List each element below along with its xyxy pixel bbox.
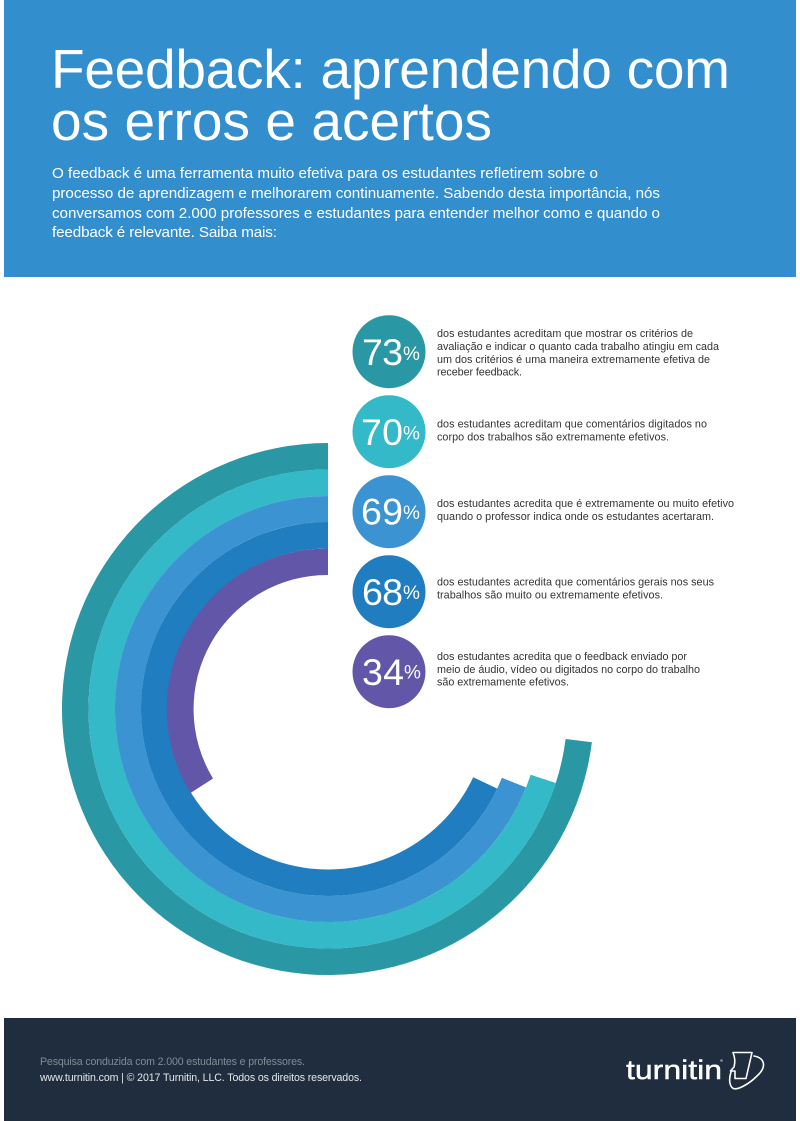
intro text: O feedback é uma ferramenta muito efetiva para os estudantes refletirem sobre o bbox=[52, 165, 598, 182]
stat text: 70% bbox=[437, 418, 707, 443]
stat text: 69% bbox=[437, 498, 734, 523]
stat text: 34%: são extremamente efetivos. bbox=[437, 676, 569, 688]
stat text: 34%: meio de áudio, vídeo ou digitados no corpo do trabalho bbox=[437, 664, 700, 676]
circle badge: 69%: % bbox=[403, 503, 420, 524]
stat text: 70%: corpo dos trabalhos são extremamente efetivos. bbox=[437, 431, 669, 443]
stat text: 34%: dos estudantes acredita que o feedback enviado por bbox=[437, 651, 687, 663]
title bbox=[51, 38, 730, 152]
stat text: 69%: quando o professor indica onde os estudantes acertaram. bbox=[437, 511, 714, 523]
intro text bbox=[52, 165, 660, 241]
footer panel bbox=[4, 1018, 796, 1121]
circle badge: 70% bbox=[352, 395, 426, 468]
stat: 69% bbox=[352, 475, 734, 548]
logo: turnitin: turnitin bbox=[626, 1055, 722, 1085]
intro text: processo de aprendizagem e melhorarem continuamente. Sabendo desta importância, nós bbox=[52, 185, 660, 202]
stat text: 73%: avaliação e indicar o quanto cada trabalho atingiu em cada bbox=[437, 341, 719, 353]
circle badge: 69% bbox=[352, 475, 426, 548]
intro text: feedback é relevante. Saiba mais: bbox=[52, 224, 277, 241]
title: os erros e acertos bbox=[51, 90, 492, 152]
circle badge: 68%: % bbox=[403, 583, 420, 604]
stat text: 73%: um dos critérios é uma maneira extremamente efetiva de bbox=[437, 354, 710, 366]
circle badge: 73%: % bbox=[403, 344, 420, 365]
arc: 70% bbox=[89, 470, 556, 948]
arc: 73% bbox=[62, 443, 592, 975]
stat: 73% bbox=[352, 315, 719, 388]
stat text: 73%: receber feedback. bbox=[437, 367, 522, 379]
stat text: 34% bbox=[437, 651, 700, 688]
arc: 69% bbox=[115, 496, 526, 922]
title: Feedback: aprendendo com bbox=[51, 38, 730, 100]
stat text: 73% bbox=[437, 328, 719, 379]
circle badge: 70%: % bbox=[403, 424, 420, 444]
circle badge: 68% bbox=[352, 555, 426, 628]
circle badge: 73%: 73 bbox=[362, 331, 403, 373]
radial bar chart bbox=[62, 443, 592, 975]
logo: turnitin bbox=[626, 1052, 763, 1089]
circle badge: 73% bbox=[352, 315, 426, 388]
stat: 70% bbox=[352, 395, 707, 468]
stat text: 70%: dos estudantes acreditam que comentários digitados no bbox=[437, 418, 707, 430]
stat text: 73%: dos estudantes acreditam que mostrar os critérios de bbox=[437, 328, 693, 340]
footer text: Pesquisa conduzida com 2.000 estudantes e professores. bbox=[40, 1056, 305, 1068]
circle badge: 68%: 68 bbox=[362, 571, 403, 613]
stat: 68% bbox=[352, 555, 715, 628]
stat text: 69%: dos estudantes acredita que é extremamente ou muito efetivo bbox=[437, 498, 734, 510]
circle badge: 34%: 34 bbox=[362, 651, 404, 693]
stat text: 68%: dos estudantes acredita que comentários gerais nos seus bbox=[437, 577, 715, 589]
circle badge: 69%: 69 bbox=[361, 490, 403, 532]
circle badge: 70%: 70 bbox=[361, 411, 403, 453]
footer text: www.turnitin.com | © 2017 Turnitin, LLC. Todos os direitos reservados. bbox=[39, 1072, 362, 1084]
header panel bbox=[4, 0, 796, 277]
stat: 34% bbox=[352, 635, 700, 708]
circle badge: 34% bbox=[352, 635, 426, 708]
circle badge: 34%: % bbox=[404, 662, 421, 684]
stat text: 68% bbox=[437, 577, 715, 602]
arc: 34% bbox=[167, 548, 328, 793]
intro text: conversamos com 2.000 professores e estudantes para entender melhor como e quando o bbox=[52, 205, 660, 222]
stat text: 68%: trabalhos são muito ou extremamente efetivos. bbox=[437, 590, 663, 602]
footer text bbox=[39, 1056, 362, 1084]
arc: 68% bbox=[141, 522, 497, 896]
